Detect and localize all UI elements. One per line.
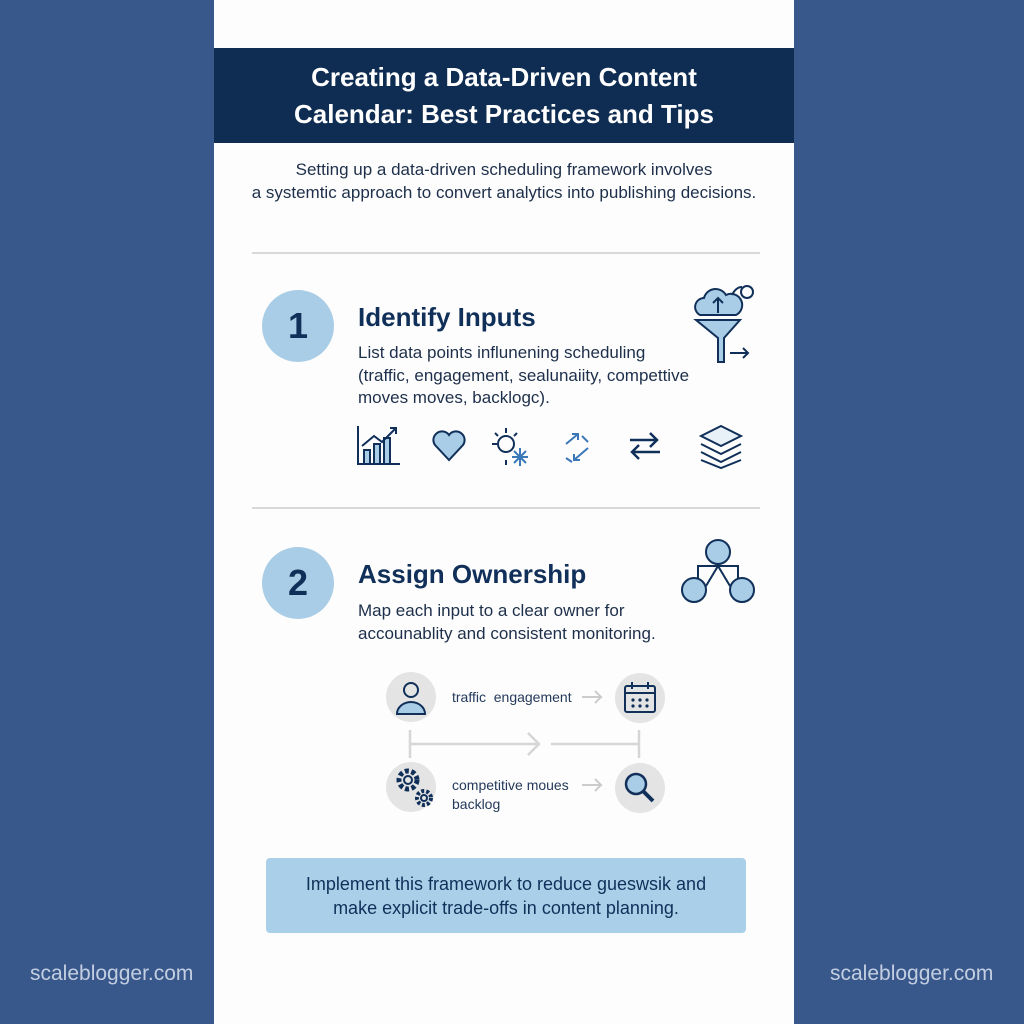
step 1 body <box>358 343 689 407</box>
step 1 body: (traffic, engagement, sealunaiity, compettive <box>358 366 689 384</box>
person circle <box>386 672 436 722</box>
callout: make explicit trade-offs in content planning. <box>333 898 679 918</box>
intro text: Setting up a data-driven scheduling framework involves <box>296 160 712 179</box>
step 2 body: Map each input to a clear owner for <box>358 601 624 620</box>
intro text <box>252 160 756 202</box>
label competitive <box>452 777 569 812</box>
title <box>214 48 794 143</box>
step 1 heading: Identify Inputs <box>358 302 536 332</box>
icon: people network <box>681 539 755 603</box>
calendar circle <box>615 673 665 723</box>
icon: cloud funnel <box>693 285 754 363</box>
label competitive: competitive moues <box>452 777 569 793</box>
step 1 number: 1 <box>288 305 308 346</box>
icon: swap <box>630 432 660 460</box>
step 2 heading: Assign Ownership <box>358 559 586 589</box>
label traffic: traffic engagement <box>452 689 572 705</box>
search circle <box>615 763 665 813</box>
watermark right: scaleblogger.com <box>830 962 993 985</box>
step 2 body <box>358 601 656 642</box>
gear circle <box>386 762 436 812</box>
icons row <box>357 424 744 470</box>
step 2 body: accounablity and consistent monitoring. <box>358 624 656 642</box>
flow diagram <box>386 672 665 813</box>
icon: chart <box>357 426 400 465</box>
title: Calendar: Best Practices and Tips <box>294 98 714 128</box>
callout: Implement this framework to reduce gueswsik and <box>306 874 706 894</box>
connector <box>408 730 640 758</box>
icon: heart <box>432 430 466 462</box>
label competitive: backlog <box>452 796 500 812</box>
callout <box>266 858 746 933</box>
icon: layers <box>698 424 744 470</box>
step 1 number <box>262 290 334 362</box>
step 1 body: moves moves, backlogc). <box>358 388 550 407</box>
panel: main <box>214 0 794 1024</box>
title: Creating a Data-Driven Content <box>311 62 697 92</box>
step 2 number <box>262 547 334 619</box>
step 2 number: 2 <box>288 562 308 603</box>
icon: sun snow <box>492 428 528 466</box>
icon: moves <box>565 433 589 463</box>
intro text: a systemtic approach to convert analytics into publishing decisions. <box>252 183 756 202</box>
step 1 body: List data points influnening scheduling <box>358 343 645 362</box>
watermark left: scaleblogger.com <box>30 962 193 985</box>
